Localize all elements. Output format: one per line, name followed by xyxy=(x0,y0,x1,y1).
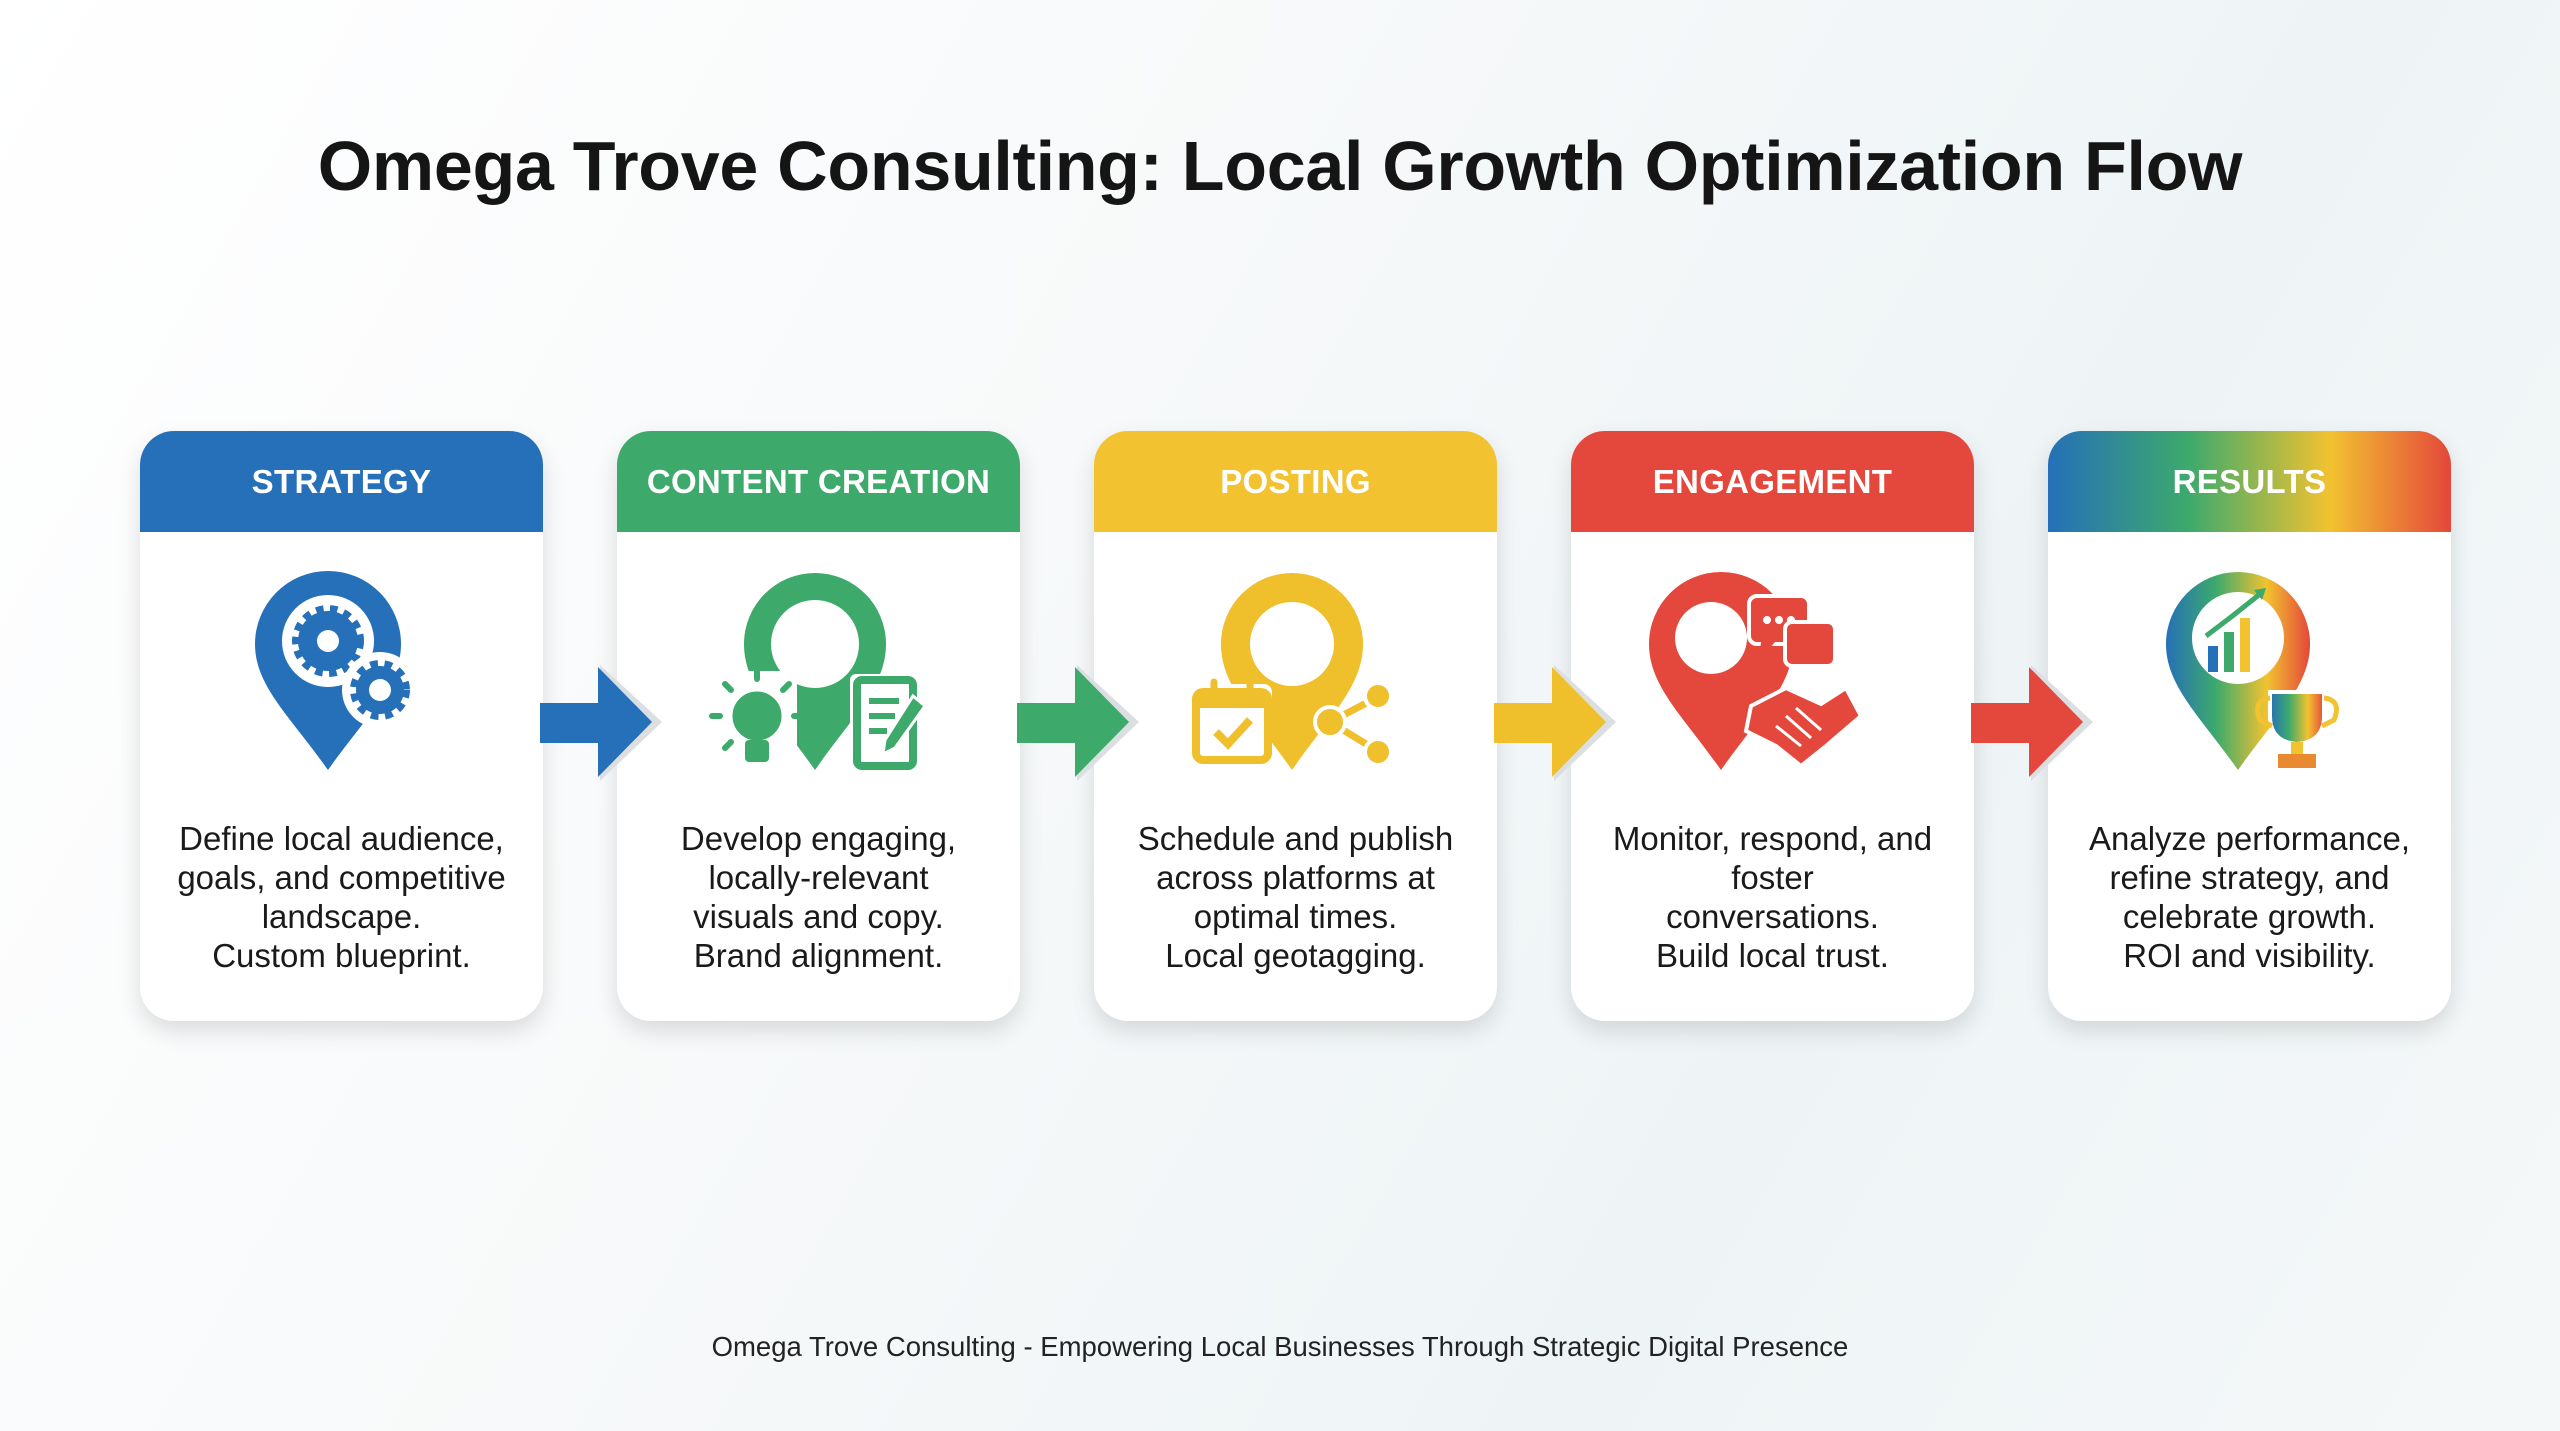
text: strategy: goals, and competitive xyxy=(177,859,506,896)
header: content creation: CONTENT CREATION xyxy=(647,463,990,500)
text: content creation: visuals and copy. xyxy=(693,898,944,935)
text: strategy: Define local audience, xyxy=(179,820,504,857)
text: results: refine strategy, and xyxy=(2109,859,2390,896)
panel: engagement xyxy=(1571,431,1974,1021)
arrow 2 xyxy=(1017,665,1139,781)
icon: pin with calendar and share xyxy=(1192,573,1389,770)
header: posting: POSTING xyxy=(1220,463,1371,500)
header: engagement: ENGAGEMENT xyxy=(1653,463,1892,500)
arrow 4 xyxy=(1971,665,2093,781)
arrow 1 xyxy=(540,665,662,781)
header: content creation xyxy=(617,431,1020,532)
text: engagement: Build local trust. xyxy=(1656,937,1889,974)
footer: Omega Trove Consulting - Empowering Local Businesses Through Strategic Digital Presence xyxy=(712,1331,1848,1362)
header: results xyxy=(2048,431,2451,532)
text: posting: across platforms at xyxy=(1156,859,1435,896)
text: content creation: Brand alignment. xyxy=(694,937,943,974)
arrow 3 xyxy=(1494,665,1616,781)
panel: strategy xyxy=(140,431,543,1021)
text: content creation: Develop engaging, xyxy=(681,820,956,857)
text: strategy: landscape. xyxy=(262,898,421,935)
header: strategy: STRATEGY xyxy=(252,463,431,500)
text: engagement xyxy=(1613,820,1932,974)
icon: pin with chat and handshake xyxy=(1649,572,1858,770)
text: results: celebrate growth. xyxy=(2123,898,2376,935)
text: posting: optimal times. xyxy=(1194,898,1397,935)
icon: pin with gears xyxy=(255,571,410,770)
text: posting xyxy=(1138,820,1453,974)
text: engagement: foster xyxy=(1731,859,1814,896)
text: strategy xyxy=(177,820,506,974)
text: content creation xyxy=(681,820,956,974)
panel: results xyxy=(2048,431,2451,1021)
title: Omega Trove Consulting: Local Growth Optimization Flow xyxy=(318,127,2242,205)
header: results: RESULTS xyxy=(2173,463,2326,500)
icon: gradient pin with chart and trophy xyxy=(2166,572,2339,770)
header: engagement xyxy=(1571,431,1974,532)
icon: pin with bulb and document xyxy=(709,573,923,770)
text: strategy: Custom blueprint. xyxy=(212,937,471,974)
text: content creation: locally-relevant xyxy=(708,859,929,896)
header: strategy xyxy=(140,431,543,532)
panel: posting xyxy=(1094,431,1497,1021)
text: results: Analyze performance, xyxy=(2089,820,2410,857)
text: results: ROI and visibility. xyxy=(2123,937,2376,974)
header: posting xyxy=(1094,431,1497,532)
text: results xyxy=(2089,820,2410,974)
panel: content creation xyxy=(617,431,1020,1021)
text: posting: Schedule and publish xyxy=(1138,820,1453,857)
text: engagement: conversations. xyxy=(1666,898,1879,935)
text: engagement: Monitor, respond, and xyxy=(1613,820,1932,857)
text: posting: Local geotagging. xyxy=(1165,937,1426,974)
